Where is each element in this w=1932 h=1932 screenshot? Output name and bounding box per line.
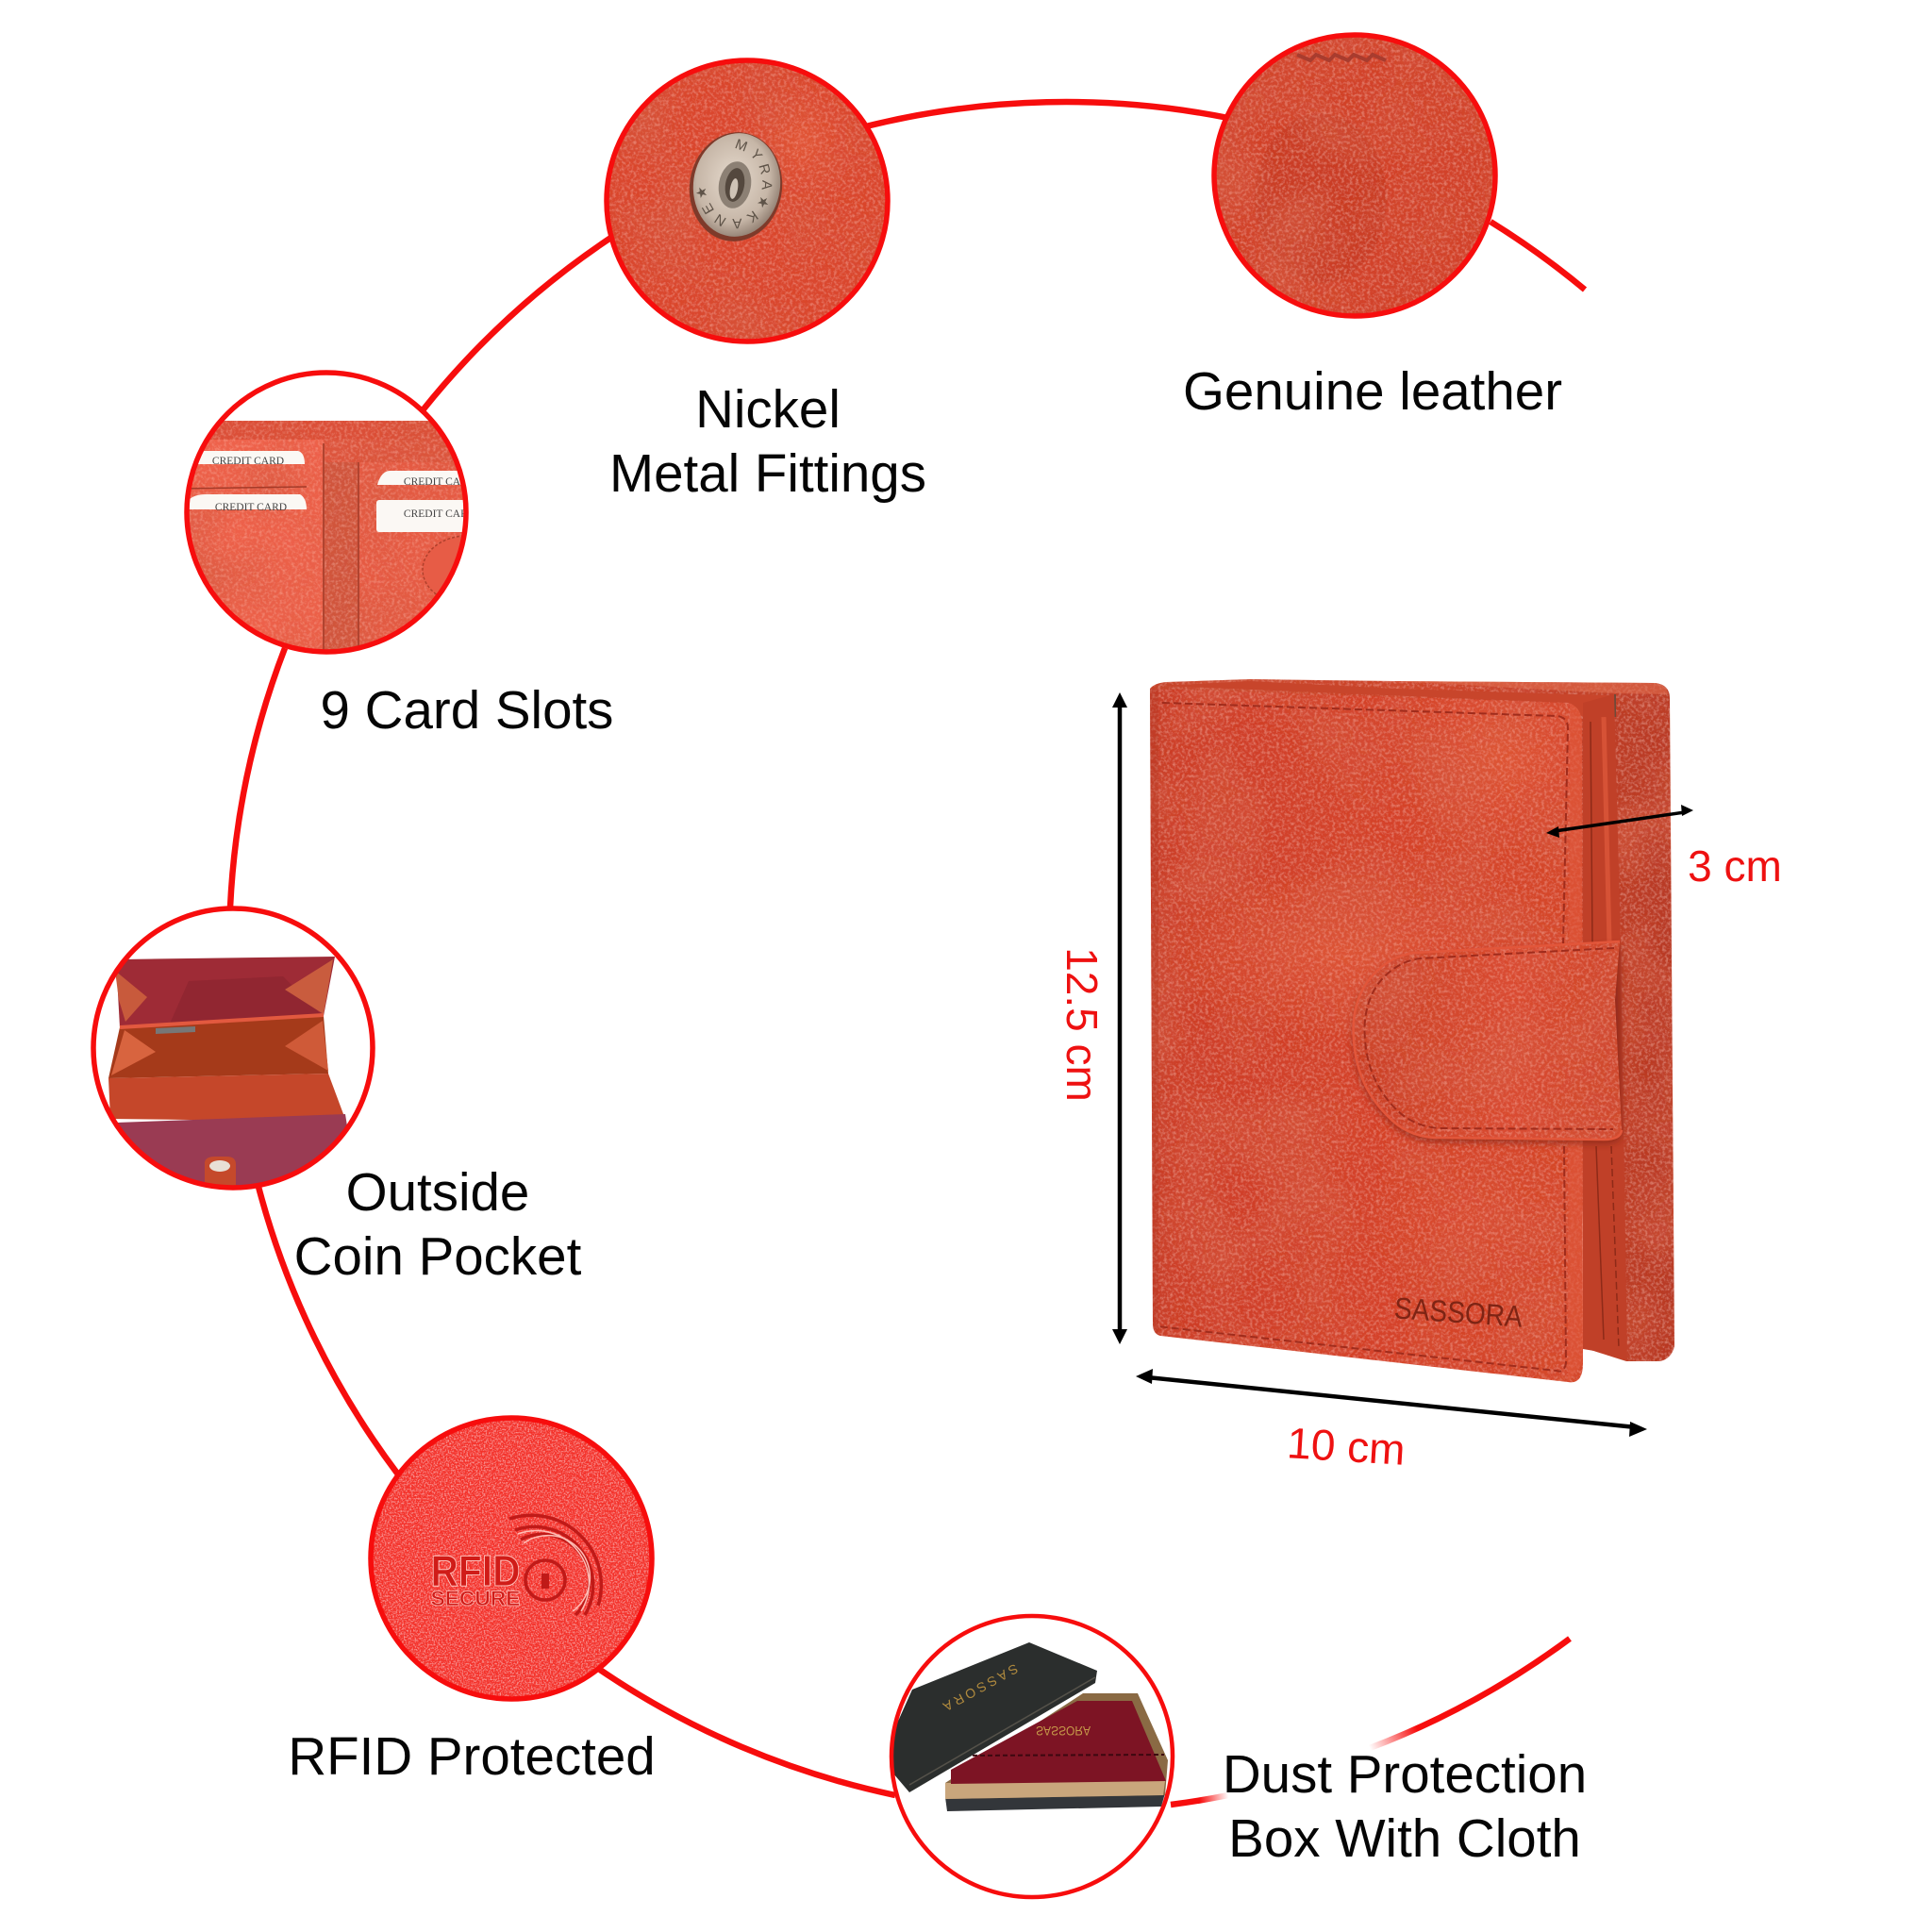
circle: card slots xyxy=(184,370,469,655)
arrow: depth 3 cm xyxy=(1546,805,1693,838)
closure strap xyxy=(1354,941,1622,1143)
circle: genuine leather xyxy=(1212,32,1499,321)
icon: RFID emboss: SECURE xyxy=(430,1587,521,1610)
label: dust protection box with cloth: Dust Protection xyxy=(1223,1744,1587,1804)
circle: RFID protected xyxy=(368,1415,655,1704)
label: 9 card slots: 9 Card Slots xyxy=(321,680,613,740)
label: outside coin pocket: Outside xyxy=(346,1162,529,1222)
circle: nickel metal fittings xyxy=(604,58,891,344)
credit card left top: CREDIT CARD xyxy=(212,456,284,467)
back panel xyxy=(1150,679,1674,1361)
circle: coin pocket xyxy=(90,906,377,1198)
brand text: SASSORA xyxy=(1393,1291,1524,1334)
wallet product photo xyxy=(1146,651,1674,1391)
label: nickel metal fittings: Nickel xyxy=(695,379,841,439)
front panel xyxy=(1150,689,1583,1383)
arrow: width 10 cm xyxy=(1136,1369,1647,1437)
label: RFID protected: RFID Protected xyxy=(288,1726,656,1786)
label: outside coin pocket: Coin Pocket xyxy=(294,1226,582,1286)
stitching xyxy=(1158,703,1568,1372)
credit card left bottom: CREDIT CARD xyxy=(215,502,287,513)
icon: RFID emboss xyxy=(430,1515,601,1615)
dimension: 10 cm: 10 cm xyxy=(1286,1418,1407,1474)
credit card right bottom: CREDIT CARD xyxy=(404,508,475,520)
box tray: SASSORA xyxy=(1036,1724,1091,1739)
credit card right top xyxy=(377,471,460,485)
label: dust protection box with cloth: Box With Cloth xyxy=(1228,1808,1581,1868)
label: nickel metal fittings: Metal Fittings xyxy=(609,443,926,503)
dimension: 12.5 cm: 12.5 cm xyxy=(1058,947,1107,1102)
icon: RFID emboss: RFID xyxy=(430,1546,521,1595)
connecting red arc xyxy=(230,102,1585,1805)
box lid xyxy=(891,1642,1097,1792)
circle: dust protection box xyxy=(891,1616,1173,1897)
box lid: SASSORA xyxy=(941,1661,1021,1715)
dimension: 3 cm: 3 cm xyxy=(1688,841,1782,891)
credit card left top xyxy=(198,451,305,464)
label: genuine leather: Genuine leather xyxy=(1183,361,1562,421)
fold gusset xyxy=(1583,694,1627,1361)
icon: nickel snap rivet: MYRA★KANE★ xyxy=(696,139,772,228)
box tray xyxy=(945,1693,1168,1811)
arrow: height 12.5 cm xyxy=(1112,692,1127,1344)
credit card right bottom xyxy=(376,500,464,532)
credit card right top: CREDIT CARD xyxy=(404,476,475,488)
credit card left bottom xyxy=(189,494,307,510)
